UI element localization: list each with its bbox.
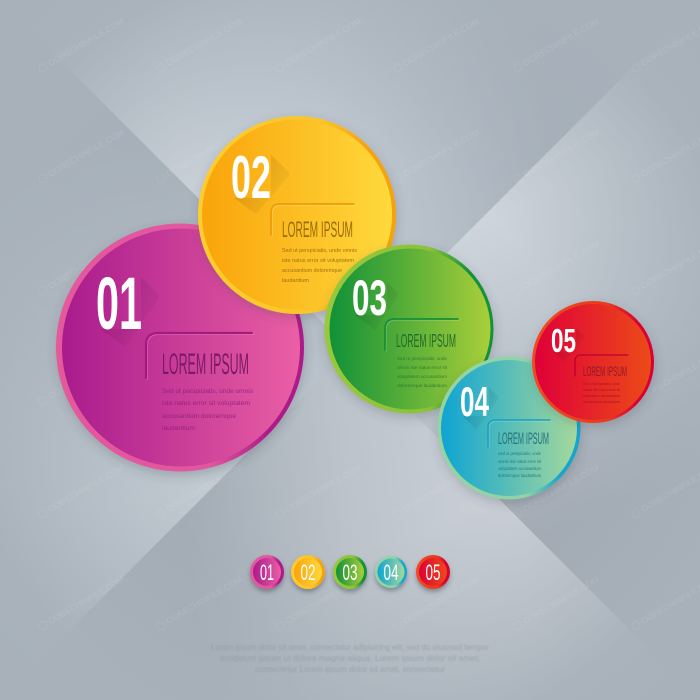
body text 02: laudantium bbox=[282, 278, 309, 284]
bracket 03 bbox=[385, 319, 459, 351]
watermark pattern: ◯ OORECHINFILE.COM bbox=[511, 239, 601, 298]
bracket 04 bbox=[488, 420, 551, 448]
watermark pattern: ◯ OORECHINFILE.COM bbox=[36, 127, 126, 186]
body text 02: Sed ut perspiciatis, unde omnis bbox=[282, 248, 357, 254]
watermark pattern: ◯ OORECHINFILE.COM bbox=[154, 16, 244, 75]
body text 01: laudantium bbox=[162, 425, 195, 432]
body text 05: voluptatem accusantium bbox=[583, 394, 620, 398]
watermark pattern: ◯ OORECHINFILE.COM bbox=[36, 349, 126, 408]
watermark pattern: ◯ OORECHINFILE.COM bbox=[36, 16, 126, 75]
body text 02: iste natus error sit voluptatem bbox=[282, 258, 354, 264]
panel: circle 03 bbox=[324, 244, 494, 414]
watermark pattern: ◯ OORECHINFILE.COM bbox=[391, 574, 481, 633]
bracket 05 bbox=[575, 355, 628, 376]
watermark pattern: ◯ OORECHINFILE.COM bbox=[36, 462, 126, 521]
footer caption: consectetur Lorem ipsum dolor sit amet, consectetur bbox=[255, 664, 445, 674]
badge 02: 02 bbox=[300, 560, 316, 585]
body text 03: Sed ut perspiciatis, unde bbox=[397, 356, 447, 362]
body text 03 bbox=[397, 356, 448, 389]
watermark pattern: ◯ OORECHINFILE.COM bbox=[273, 574, 363, 633]
number 01: 01 bbox=[96, 262, 142, 345]
number 05: 05 bbox=[551, 322, 576, 359]
footer caption: incididunt ipsum ut dolore magna aliqua. Lorem ipsum dolor sit amet, bbox=[220, 653, 480, 663]
body text 04: Sed ut perspiciatis, unde bbox=[498, 451, 542, 456]
panel: circle 04: LOREM IPSUM bbox=[498, 430, 549, 448]
body text 05: doloremque laudantium bbox=[583, 400, 620, 404]
badge 01: 01 bbox=[260, 560, 274, 585]
body text 01: iste natus error sit voluptatem bbox=[162, 400, 250, 407]
body text 02: accusantium doloremque bbox=[282, 268, 342, 274]
number 03: 03 bbox=[352, 270, 387, 326]
panel: circle 02 bbox=[198, 116, 396, 314]
body text 01: accusantium doloremque bbox=[162, 413, 236, 420]
number 04: 04 bbox=[460, 378, 489, 425]
watermark pattern: ◯ OORECHINFILE.COM bbox=[154, 574, 244, 633]
watermark pattern: ◯ OORECHINFILE.COM bbox=[511, 462, 601, 521]
body text 05 bbox=[583, 382, 620, 404]
body text 04: doloremque laudantium bbox=[498, 473, 542, 478]
body text 05: omnis iste natus error sit bbox=[583, 388, 620, 392]
watermark pattern: ◯ OORECHINFILE.COM bbox=[511, 127, 601, 186]
legend: numbered badges bbox=[250, 555, 450, 589]
panel: circle 03: LOREM IPSUM bbox=[396, 331, 456, 351]
watermark pattern: ◯ OORECHINFILE.COM bbox=[36, 574, 126, 633]
watermark pattern: ◯ OORECHINFILE.COM bbox=[154, 462, 244, 521]
panel: circle 01 bbox=[56, 224, 304, 472]
number 02: 02 bbox=[231, 144, 271, 211]
body text 04 bbox=[498, 451, 542, 478]
watermark pattern: ◯ OORECHINFILE.COM bbox=[391, 127, 481, 186]
watermark pattern: ◯ OORECHINFILE.COM bbox=[273, 16, 363, 75]
body text 02 bbox=[282, 248, 357, 284]
footer caption: Lorem ipsum dolor sit amet, consectetur adipisicing elit, sed do eiusmod tempor bbox=[211, 642, 489, 652]
footer caption bbox=[211, 642, 489, 674]
watermark pattern: ◯ OORECHINFILE.COM bbox=[36, 239, 126, 298]
panel: circle 04 bbox=[438, 356, 580, 500]
watermark pattern: ◯ OORECHINFILE.COM bbox=[511, 16, 601, 75]
badge 03: 03 bbox=[342, 560, 358, 585]
watermark pattern: ◯ OORECHINFILE.COM bbox=[391, 462, 481, 521]
body text 03: voluptatem accusantium bbox=[397, 374, 447, 380]
badge 05: 05 bbox=[426, 560, 440, 585]
badge 01 bbox=[250, 555, 284, 589]
body text 04: voluptatem accusantium bbox=[498, 466, 541, 471]
badge 04 bbox=[375, 556, 407, 588]
panel: circle 01: LOREM IPSUM bbox=[162, 348, 249, 381]
badge 02 bbox=[291, 555, 325, 589]
panel: circle 05 bbox=[532, 301, 654, 423]
bracket 02 bbox=[271, 204, 355, 236]
badge 03 bbox=[333, 555, 367, 589]
body text 05: Sed ut perspiciatis, unde bbox=[583, 382, 620, 386]
watermark pattern: ◯ OORECHINFILE.COM bbox=[511, 574, 601, 633]
body text 04: omnis iste natus error sit bbox=[498, 459, 542, 464]
body text 03: omnis iste natus error sit bbox=[397, 365, 448, 371]
badge 05 bbox=[416, 555, 450, 589]
body text 03: doloremque laudantium bbox=[397, 383, 447, 389]
watermark pattern: ◯ OORECHINFILE.COM bbox=[391, 16, 481, 75]
panel: circle 02: LOREM IPSUM bbox=[282, 217, 353, 242]
badge 04: 04 bbox=[384, 560, 398, 585]
bracket 01 bbox=[146, 333, 253, 379]
watermark pattern: ◯ OORECHINFILE.COM bbox=[154, 127, 244, 186]
panel: circle 05: LOREM IPSUM bbox=[583, 363, 627, 379]
body text 01 bbox=[162, 388, 254, 432]
body text 01: Sed ut perspiciatis, unde omnis bbox=[162, 388, 254, 395]
watermark pattern: ◯ OORECHINFILE.COM bbox=[273, 462, 363, 521]
